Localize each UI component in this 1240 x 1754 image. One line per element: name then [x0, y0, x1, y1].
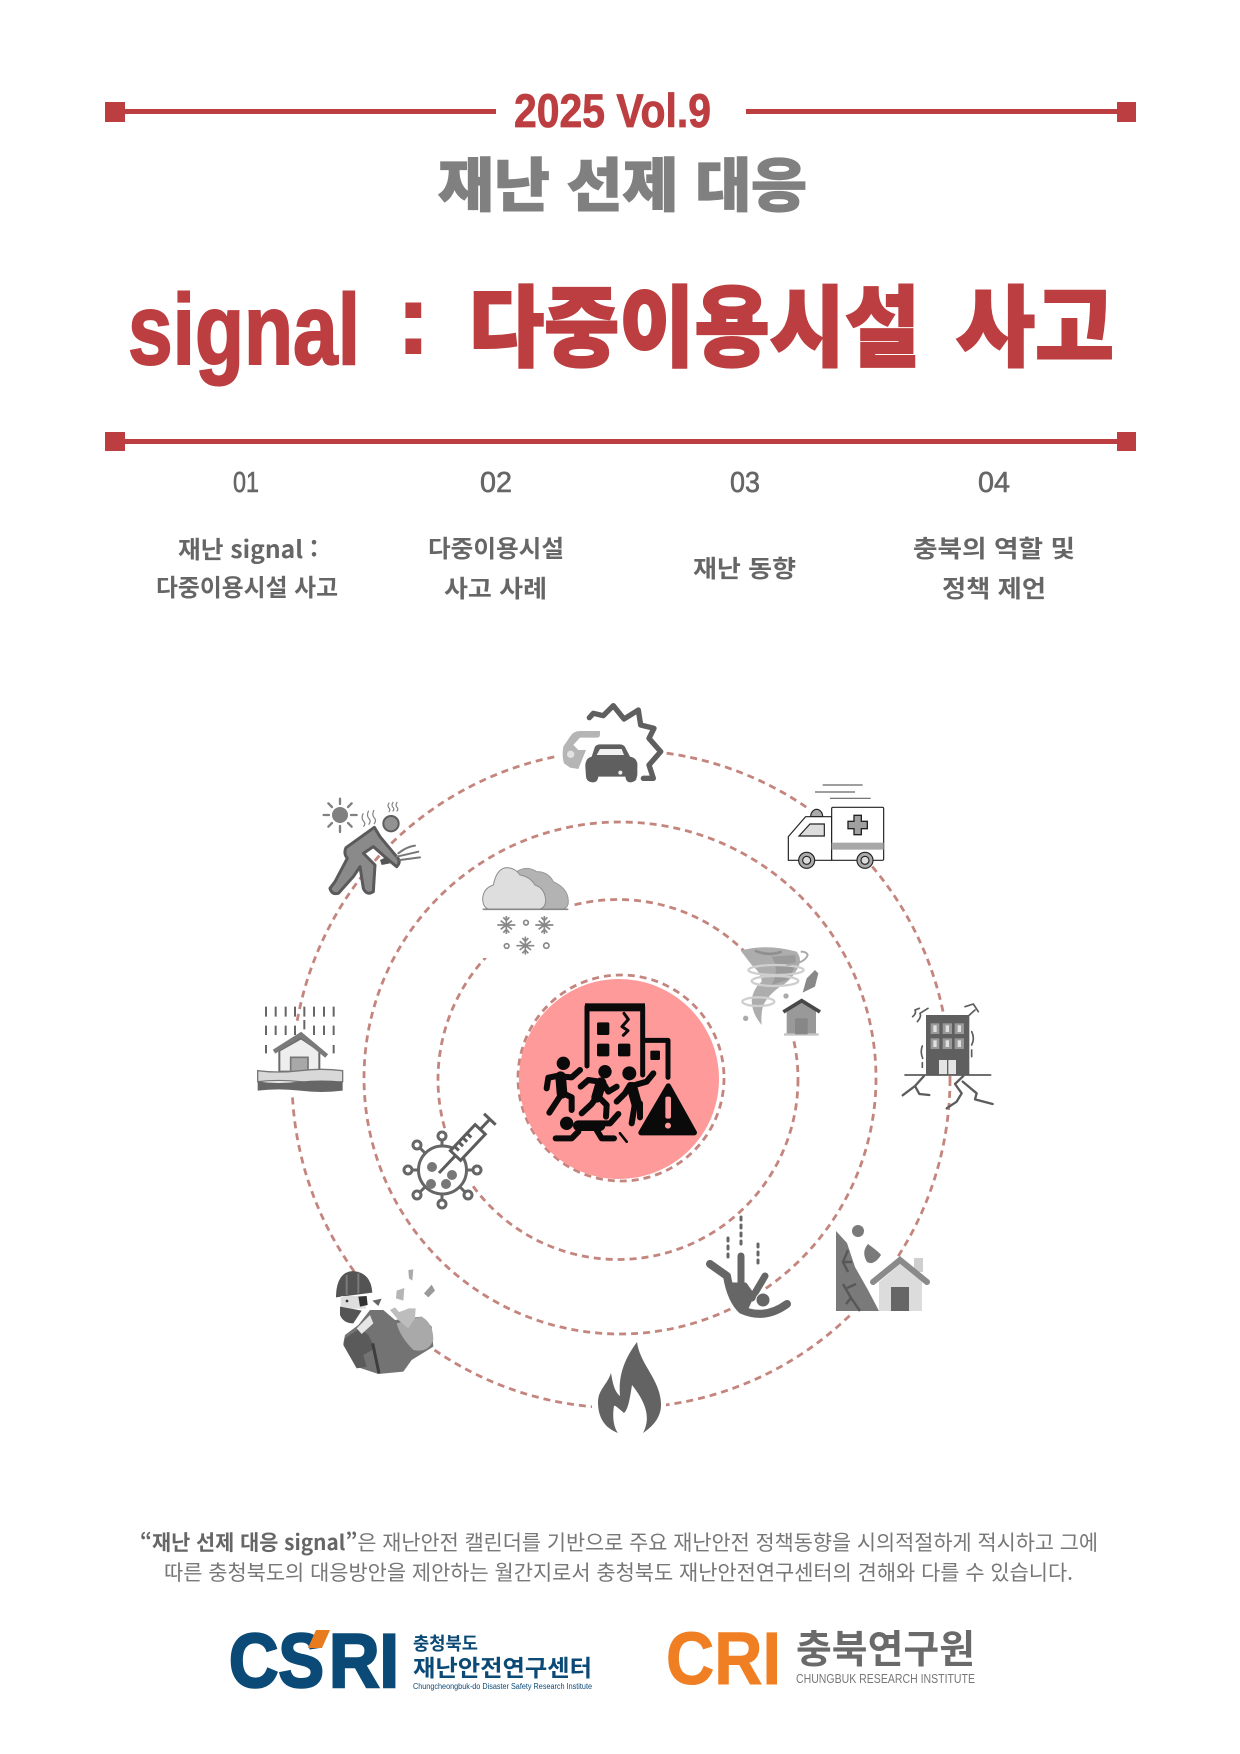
lower rule — [105, 432, 1136, 451]
icon: fire — [598, 1342, 661, 1433]
ring diagram — [292, 750, 950, 1408]
building and evacuees — [547, 1003, 694, 1142]
logo: CRI — [666, 1617, 975, 1700]
icon: building in earthquake — [903, 1004, 993, 1108]
contents item 01: 재난 signal : — [178, 530, 318, 565]
contents item 04 — [913, 467, 1075, 604]
main title: 사고 — [956, 258, 1114, 385]
contents item 02: 다중이용시설 — [428, 529, 564, 564]
contents item 03: 재난 동향 — [693, 549, 796, 584]
icon: snow cloud — [483, 868, 568, 955]
icon: tornado and house — [741, 947, 820, 1036]
disclaimer text: “재난 선제 대응 signal”은 재난안전 캘린더를 기반으로 주요 재난안전 정책동향을 시의적절하게 적시하고 그에 — [140, 1527, 1098, 1557]
main title: 다중이용시설 — [469, 258, 920, 385]
icon: landslide near house — [836, 1225, 927, 1311]
icon: ambulance — [788, 785, 884, 868]
icon: heat-stricken worker — [324, 799, 420, 894]
contents item 02: 02 — [480, 467, 512, 499]
icon: flooded house — [258, 1007, 343, 1092]
logo: CSRI: 재난안전연구센터 — [413, 1649, 592, 1683]
logo: CSRI: CS — [229, 1619, 324, 1704]
main title: signal — [128, 274, 360, 386]
logo: CRI: 충북연구원 — [796, 1619, 975, 1675]
contents item 04: 04 — [978, 467, 1010, 499]
logo: CSRI: Chungcheongbuk-do Disaster Safety Research Institute — [413, 1682, 592, 1691]
top rule left — [105, 102, 496, 122]
top rule right — [746, 102, 1136, 122]
ring gaps behind icons — [280, 700, 900, 1440]
logo: CSRI — [229, 1619, 592, 1704]
logo: CSRI: 충청북도 — [413, 1630, 478, 1656]
logo: CRI: CHUNGBUK RESEARCH INSTITUTE — [796, 1671, 975, 1686]
contents item 03: 03 — [730, 467, 760, 499]
central icon: people fleeing a damaged building — [519, 979, 719, 1179]
contents item 01 — [156, 467, 338, 603]
icon: virus and syringe — [404, 1114, 496, 1208]
contents item 02: 사고 사례 — [444, 569, 547, 604]
icon: car collision — [563, 706, 661, 782]
icon: falling person — [710, 1217, 787, 1314]
contents item 01: 01 — [233, 467, 259, 499]
volume label: 2025 Vol.9 — [514, 84, 711, 137]
contents item 03 — [693, 467, 796, 584]
disclaimer text: 따른 충청북도의 대응방안을 제안하는 월간지로서 충청북도 재난안전연구센터의 견해와 다를 수 있습니다. — [164, 1557, 1073, 1587]
subtitle: 재난 선제 대응 — [438, 139, 807, 223]
contents item 01: 다중이용시설 사고 — [156, 568, 338, 603]
logo: CRI: CRI — [666, 1617, 781, 1700]
main title: : — [397, 264, 430, 374]
contents item 04: 충북의 역할 및 — [913, 529, 1075, 564]
icon: masked worker with bag — [336, 1269, 435, 1374]
disclaimer text — [140, 1527, 1098, 1587]
main title — [128, 258, 1114, 386]
contents item 04: 정책 제언 — [942, 569, 1046, 604]
logo: CSRI: RI — [329, 1619, 399, 1704]
pink disc — [519, 979, 719, 1179]
contents item 02 — [428, 467, 564, 604]
